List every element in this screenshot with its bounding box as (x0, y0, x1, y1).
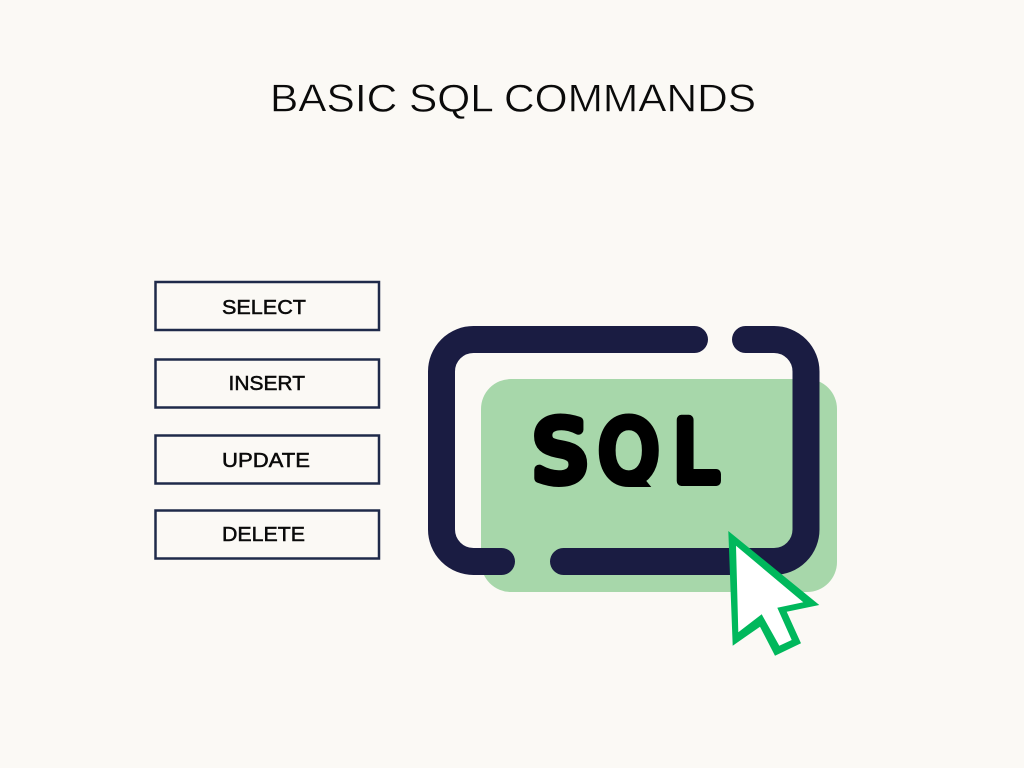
SQL label: Q (599, 403, 659, 501)
button: UPDATE (156, 436, 379, 484)
button: INSERT (156, 360, 379, 408)
icon: cursor arrow (728, 531, 819, 656)
button: INSERT: INSERT (228, 373, 305, 395)
button: SELECT (156, 282, 379, 330)
title: BASIC SQL COMMANDS (270, 78, 756, 120)
button: SELECT: SELECT (222, 297, 306, 319)
panel: command list (156, 282, 379, 558)
icon: SQL window with cursor (442, 340, 837, 656)
window frame (442, 340, 806, 562)
button: UPDATE: UPDATE (222, 450, 310, 472)
SQL label: L (674, 404, 717, 502)
SQL label (534, 414, 721, 487)
SQL label: S (534, 403, 587, 501)
button: DELETE: DELETE (222, 524, 305, 546)
green panel (481, 379, 837, 592)
button: DELETE (156, 510, 379, 558)
